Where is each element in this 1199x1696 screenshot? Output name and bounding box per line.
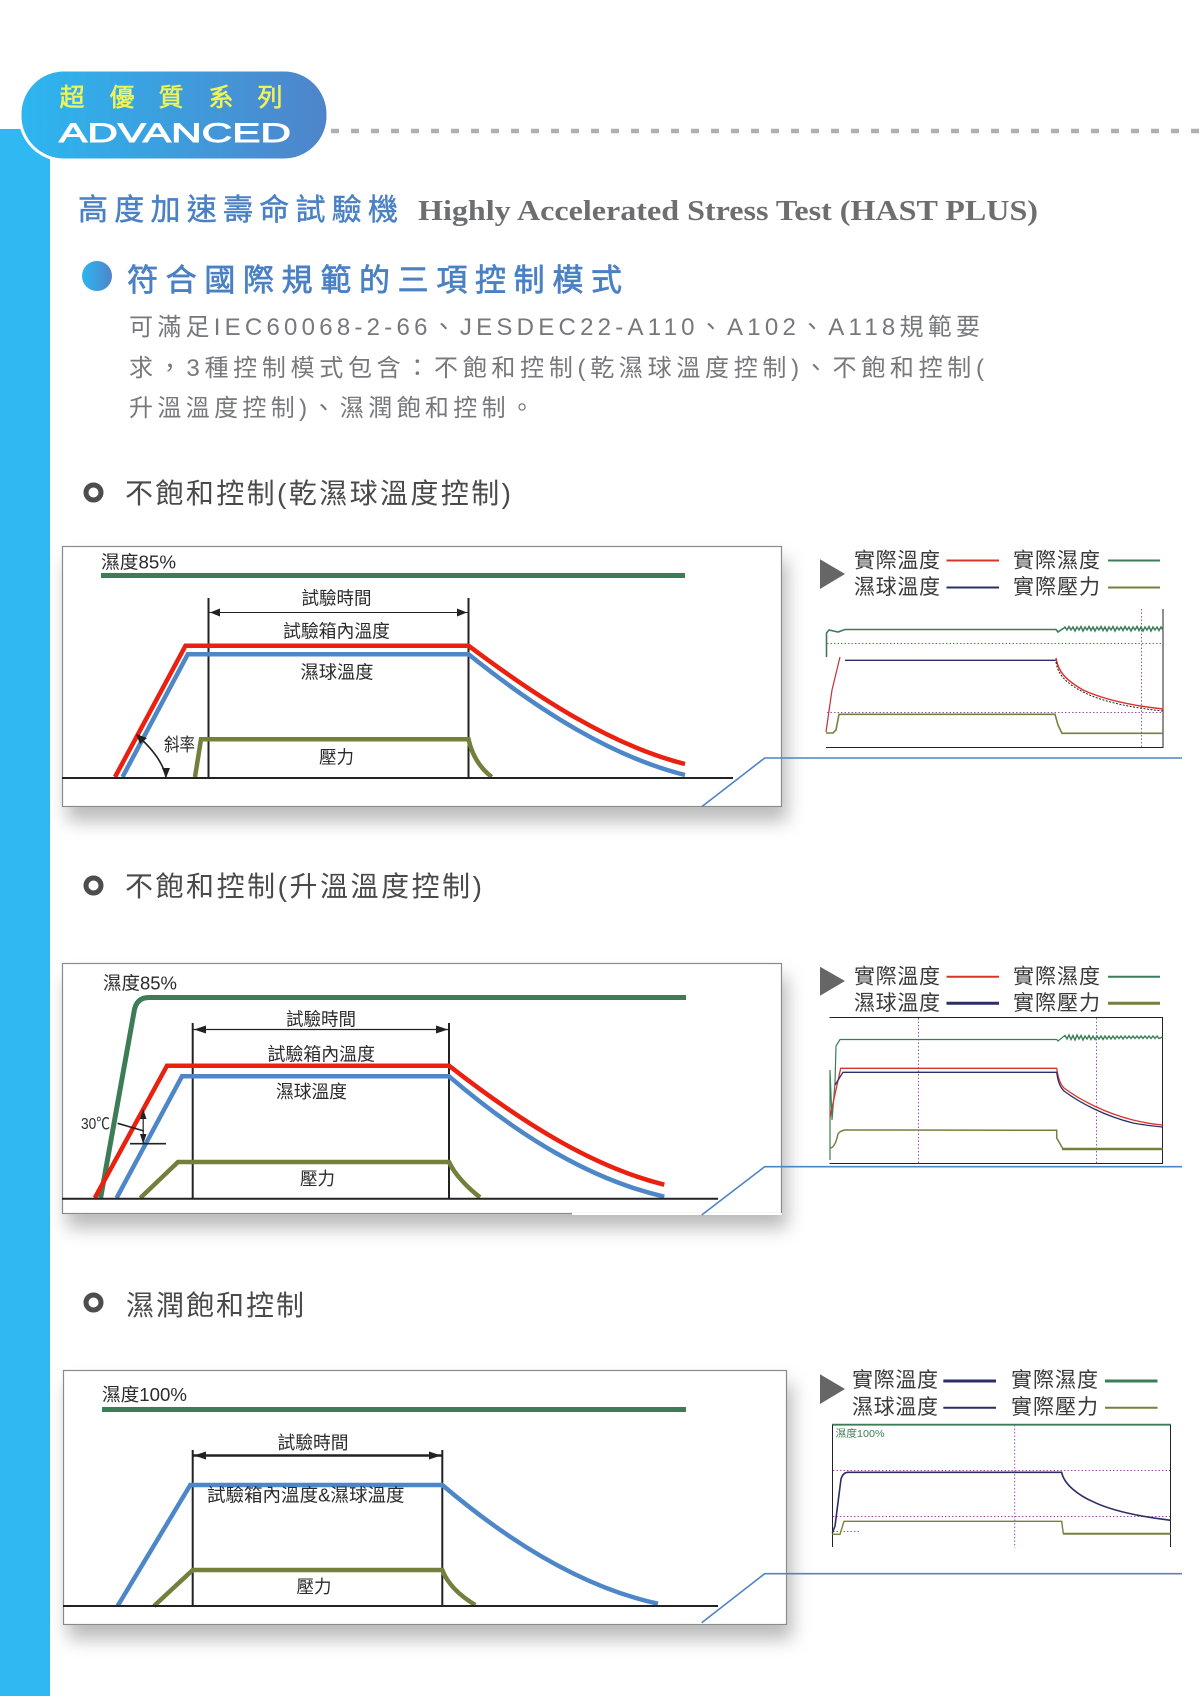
humidity curve — [101, 998, 686, 1198]
baseline — [62, 777, 733, 779]
chart 3 humidity label: 濕度100% — [836, 1427, 885, 1440]
pressure curve — [195, 739, 492, 777]
badge Chinese text — [60, 84, 283, 112]
label: humidity 100: 濕度100% — [102, 1385, 187, 1405]
slope arrow — [136, 734, 170, 778]
legend 1: 濕球溫度 — [854, 576, 940, 599]
legend 1: 實際壓力 — [1013, 576, 1100, 599]
dotted header rule — [331, 129, 1199, 133]
legend 3: 實際濕度 — [1011, 1369, 1098, 1392]
badge Chinese text: 系 — [208, 84, 234, 112]
panel: diagram 3 — [63, 1370, 786, 1624]
subheading: 符合國際規範的三項控制模式 — [127, 263, 622, 298]
section 1 heading: 不飽和控制(乾濕球溫度控制) — [125, 478, 511, 509]
humidity line — [101, 573, 685, 578]
callout line 1 — [702, 758, 1182, 807]
chart 1 — [826, 609, 1163, 748]
pressure curve — [154, 1570, 475, 1606]
30C annotation — [81, 1109, 166, 1144]
test time bracket — [193, 1450, 442, 1606]
label: wet bulb: 濕球溫度 — [276, 1082, 347, 1102]
test time bracket — [193, 1023, 449, 1198]
label: pressure: 壓力 — [300, 1169, 335, 1189]
sidebar — [0, 129, 50, 1696]
baseline — [63, 1605, 718, 1607]
callout line 2 — [702, 1167, 1182, 1215]
section 3 heading: 濕潤飽和控制 — [126, 1290, 304, 1321]
panel: diagram 1 — [62, 546, 782, 806]
label: pressure: 壓力 — [319, 748, 354, 768]
label: humidity 85: 濕度85% — [101, 552, 176, 572]
wet bulb curve — [122, 654, 685, 777]
test time bracket — [208, 598, 468, 778]
label: test time: 試驗時間 — [302, 588, 372, 608]
legend 1 — [820, 550, 1160, 599]
legend 3: 實際壓力 — [1011, 1396, 1098, 1419]
legend 3: 實際溫度 — [852, 1369, 938, 1392]
series badge — [20, 70, 328, 160]
section 2 heading: 不飽和控制(升溫溫度控制) — [125, 871, 482, 902]
badge Chinese text: 優 — [110, 84, 135, 112]
legend 2: 實際濕度 — [1013, 966, 1100, 988]
icon: heading bullet — [82, 261, 112, 291]
badge Chinese text: 列 — [258, 84, 283, 112]
baseline — [62, 1198, 718, 1200]
chart 3 — [832, 1425, 1171, 1548]
legend 2 — [820, 966, 1160, 1015]
body paragraph: 升溫溫度控制)、濕潤飽和控制。 — [129, 395, 534, 422]
legend 3: 濕球溫度 — [852, 1396, 938, 1419]
label: wet bulb: 濕球溫度 — [300, 662, 374, 682]
legend 2: 實際壓力 — [1013, 992, 1100, 1015]
pressure curve — [140, 1162, 480, 1198]
label: chamber temp: 試驗箱內溫度 — [283, 622, 390, 642]
label: chamber temp: 試驗箱內溫度 — [268, 1044, 375, 1064]
body paragraph: 可滿足IEC60068-2-66、JESDEC22-A110、A102、A118規範要 — [129, 314, 980, 341]
label: humidity 85: 濕度85% — [103, 974, 177, 994]
title — [78, 194, 1038, 227]
chamber temperature curve — [115, 646, 685, 777]
English title: Highly Accelerated Stress Test (HAST PLUS) — [418, 195, 1038, 227]
badge English text: ADVANCED — [59, 118, 291, 148]
label: pressure: 壓力 — [296, 1577, 332, 1597]
legend 2: 實際溫度 — [854, 966, 940, 988]
humidity line — [102, 1407, 686, 1412]
combined temperature curve — [118, 1485, 658, 1606]
title: 高度加速壽命試驗機 — [78, 194, 398, 227]
label: slope: 斜率 — [164, 735, 195, 755]
body paragraph: 求，3種控制模式包含：不飽和控制(乾濕球溫度控制)、不飽和控制( — [129, 355, 984, 382]
label: test time: 試驗時間 — [286, 1010, 356, 1030]
legend 3 — [820, 1369, 1158, 1419]
body paragraph — [129, 314, 984, 422]
legend 2: 濕球溫度 — [854, 992, 940, 1015]
label: test time: 試驗時間 — [278, 1433, 348, 1453]
badge Chinese text: 質 — [158, 84, 184, 112]
legend 1: 實際溫度 — [854, 550, 940, 572]
legend 1: 實際濕度 — [1013, 550, 1100, 572]
badge Chinese text: 超 — [60, 84, 85, 112]
label: chamber and wet bulb temp: 試驗箱內溫度&濕球溫度 — [207, 1486, 404, 1506]
panel: diagram 2 — [62, 964, 782, 1214]
wet bulb curve — [117, 1076, 664, 1198]
callout line 3 — [702, 1574, 1182, 1623]
30C annotation: 30℃ — [81, 1116, 110, 1133]
chamber temperature curve — [95, 1066, 664, 1198]
chart 2 — [830, 1018, 1162, 1164]
